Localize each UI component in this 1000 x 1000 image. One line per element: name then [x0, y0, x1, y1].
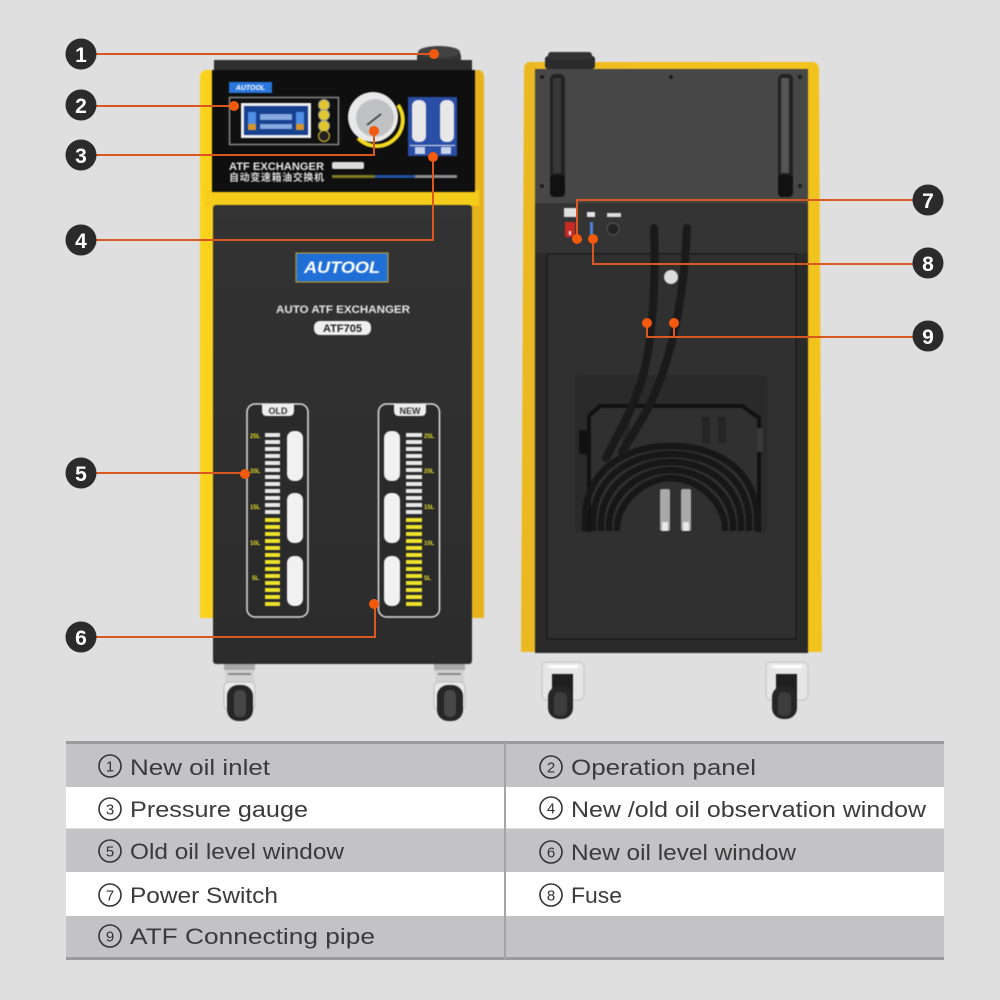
item 4: 4 [547, 800, 555, 818]
new oil inlet cap [417, 46, 461, 70]
rear machine [521, 52, 822, 719]
badge 9: 9 [922, 326, 934, 349]
scale labels: 10L [424, 541, 435, 547]
model badge [314, 321, 371, 335]
brand logo: AUTOOL [303, 258, 380, 277]
badge 1 [66, 38, 96, 70]
item 3: 3 [106, 802, 114, 818]
head subtitle: 自动变速箱油交换机 [229, 171, 324, 184]
badge 2 [66, 90, 96, 120]
observation window [408, 97, 457, 156]
tubes [287, 431, 303, 606]
badge 9 [912, 320, 944, 352]
pressure gauge [348, 92, 403, 146]
small logo [229, 82, 272, 93]
badge 8: 8 [922, 253, 934, 276]
colour bar [332, 175, 457, 178]
cable nut [664, 270, 678, 284]
number badges [66, 38, 944, 652]
OLD tab: OLD [268, 406, 288, 416]
badge 7: 7 [922, 190, 934, 213]
ticks [265, 433, 280, 514]
badge 5: 5 [75, 463, 87, 486]
scale labels [424, 434, 435, 582]
item 4: New /old oil observation window [571, 797, 926, 822]
screws [540, 75, 802, 188]
badge 6: 6 [75, 627, 87, 650]
badge 3 [66, 140, 96, 170]
brand logo [296, 253, 388, 282]
leader 4 [96, 152, 438, 240]
scale labels: 25L [250, 434, 261, 440]
control head [212, 70, 475, 192]
model tag [332, 162, 364, 169]
leader 2 [96, 101, 239, 111]
small logo: AUTOOL [235, 85, 265, 92]
badge 4: 4 [75, 230, 87, 253]
item 5: 5 [106, 844, 114, 860]
front machine [200, 46, 484, 721]
new oil level window [378, 404, 440, 617]
scale labels: 5L [424, 576, 431, 582]
item 2: Operation panel [571, 755, 756, 780]
item 3: Pressure gauge [130, 797, 308, 822]
operation panel [230, 98, 338, 144]
front casters [224, 664, 465, 721]
leader 3 [96, 126, 379, 155]
callout leaders [96, 49, 913, 637]
lower frame [535, 253, 808, 653]
rear upper panel [535, 69, 808, 203]
OLD tab [262, 404, 294, 416]
badge 8 [912, 248, 944, 278]
item 1 [99, 755, 270, 780]
power switch [564, 208, 577, 237]
item 9: ATF Connecting pipe [130, 924, 375, 949]
item 1: New oil inlet [130, 755, 270, 780]
leader 5 [96, 469, 250, 479]
scale labels: 25L [424, 434, 435, 440]
parts legend table [66, 741, 944, 960]
model badge: ATF705 [323, 323, 362, 335]
badge 5 [66, 458, 96, 488]
scale labels: 15L [424, 505, 435, 511]
item 8 [540, 883, 622, 908]
lower inner panel [547, 254, 796, 639]
yellow shell [521, 62, 822, 652]
yellow collar [205, 190, 479, 206]
badge 4 [66, 224, 96, 256]
tubes [384, 431, 400, 606]
head title: ATF EXCHANGER [229, 161, 324, 173]
badge 3: 3 [75, 145, 87, 168]
scale labels: 20L [424, 469, 435, 475]
right handle [778, 74, 793, 197]
yellow side panels [200, 70, 484, 618]
cable coil [585, 446, 757, 531]
scale labels [250, 434, 261, 582]
badge 1: 1 [75, 44, 87, 67]
storage compartment [575, 375, 767, 532]
top strip [214, 60, 472, 71]
leader 6 [96, 599, 379, 637]
item 7: Power Switch [130, 883, 278, 908]
item 6: New oil level window [571, 840, 796, 865]
quick connectors [660, 489, 691, 531]
scale labels: 5L [252, 576, 259, 582]
item 7: 7 [106, 888, 114, 904]
NEW tab: NEW [400, 406, 421, 416]
main body [213, 205, 472, 664]
NEW tab [394, 404, 426, 416]
leader 9 [642, 318, 913, 337]
old oil level window [247, 404, 308, 617]
fuse [587, 212, 595, 235]
rear casters [542, 662, 808, 719]
item 9: 9 [106, 928, 114, 946]
item 8: Fuse [571, 883, 622, 908]
leader 1 [96, 49, 439, 59]
item 5: Old oil level window [130, 839, 344, 864]
item 1: 1 [106, 758, 114, 776]
connector band [535, 203, 808, 253]
connecting hoses [606, 228, 687, 458]
item 6: 6 [547, 844, 555, 862]
leader 7 [572, 200, 913, 244]
badge 7 [912, 184, 944, 216]
item 2: 2 [547, 760, 555, 776]
scale labels: 15L [250, 505, 261, 511]
badge 2: 2 [75, 95, 87, 118]
scale labels: 10L [250, 541, 261, 547]
item 8: 8 [547, 888, 555, 904]
scale labels: 20L [250, 469, 261, 475]
badge 6 [66, 622, 96, 652]
ticks [406, 433, 422, 514]
table rows [66, 741, 944, 960]
leader 8 [588, 234, 913, 264]
product name: AUTO ATF EXCHANGER [276, 304, 410, 316]
dc port [607, 213, 621, 235]
rear cap [545, 52, 595, 69]
left handle [550, 74, 565, 197]
